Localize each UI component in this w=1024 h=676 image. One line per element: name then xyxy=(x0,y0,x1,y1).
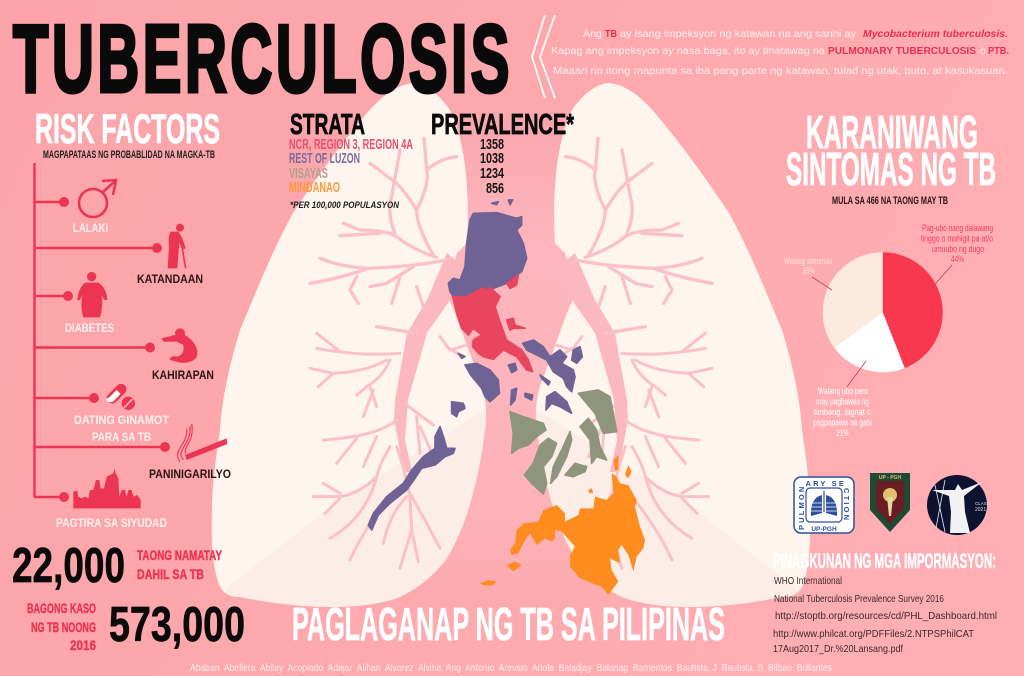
pie label: cough: linggo o mahigit pa at/o xyxy=(921,234,993,244)
table headers: STRATA xyxy=(290,109,365,141)
intro text: Maaari rin itong mapunta sa iba pang parte ng katawan, tulad ng utak, buto, at kasukasuan. xyxy=(553,65,1008,77)
sources list xyxy=(773,575,997,655)
heading: risk factors: RISK FACTORS xyxy=(35,105,220,152)
table headers: PREVALENCE* xyxy=(431,109,574,141)
table region names xyxy=(289,136,413,196)
pie label: no cough but other symptoms: pagpapawis sa gabi xyxy=(813,418,872,428)
table region names: REST OF LUZON xyxy=(289,150,360,167)
label: paninigarilyo: PANINIGARILYO xyxy=(149,469,231,481)
pie label: no cough but other symptoms: may pagbawas ng xyxy=(816,396,869,406)
logo: pulmonary section: PULMONARY SECTION xyxy=(799,481,849,530)
pie label: no symptoms xyxy=(784,256,832,276)
intro text: PULMONARY TUBERCULOSIS xyxy=(828,45,976,57)
risk factors subheading: MAGPAPATAAS NG PROBABLIDAD NA MAGKA-TB xyxy=(43,149,215,161)
icon: male symbol xyxy=(79,180,116,217)
icon: poverty, begging person xyxy=(162,328,197,363)
logo: class 2021 xyxy=(927,475,990,535)
table prevalence numbers: 1234 xyxy=(480,165,504,182)
risk factor timeline xyxy=(34,163,170,502)
table prevalence numbers: 856 xyxy=(486,180,504,197)
stat: new cases caption xyxy=(27,600,96,653)
map: Mindanao xyxy=(480,455,645,595)
intro text xyxy=(551,28,1009,77)
icon: elderly person with cane xyxy=(168,224,186,268)
pie label: no cough but other symptoms: timbang, lagnat o xyxy=(814,407,871,417)
label: diabetes: DIABETES xyxy=(65,323,114,335)
label: dating ginamot para sa tb: PARA SA TB xyxy=(92,432,151,444)
intro text: ay isang impeksyon ng katawan na ang sanhi ay xyxy=(620,28,857,40)
sources list: http://stoptb.org/resources/cd/PHL_Dashboard.html xyxy=(775,610,997,622)
label: dating ginamot para sa tb xyxy=(74,415,169,444)
sources list: WHO International xyxy=(774,575,842,587)
map: Visayas xyxy=(510,390,617,494)
stat: new cases caption: 2016 xyxy=(70,637,96,653)
heading: karaniwang sintomas xyxy=(786,106,996,195)
stat: new cases number: 573,000 xyxy=(109,598,245,652)
pie label: no symptoms: Walang sintomas xyxy=(784,256,832,266)
trachea column xyxy=(440,120,584,610)
label: lalaki: LALAKI xyxy=(73,223,108,235)
icon: cigarette xyxy=(178,424,227,462)
label: dating ginamot para sa tb: DATING GINAMOT xyxy=(74,415,169,427)
strata table xyxy=(289,109,574,211)
icon: overweight person xyxy=(77,272,107,317)
pie label: cough xyxy=(921,223,993,264)
logo: department of medicine shield xyxy=(870,473,910,532)
stat: new cases caption: NG TB NOONG xyxy=(31,619,96,635)
logo: pulmonary section: UP-PGH xyxy=(811,526,837,533)
stat: deaths caption: TAONG NAMATAY xyxy=(137,547,222,563)
intro text: PTB. xyxy=(988,45,1009,57)
pie label: no cough but other symptoms xyxy=(813,386,872,438)
table prevalence numbers xyxy=(480,136,504,197)
right lung illustration xyxy=(522,83,822,620)
logo: class 2021: CLASS xyxy=(975,501,990,506)
sources list: 17Aug2017_Dr.%20Lansang.pdf xyxy=(773,643,903,655)
left lung illustration xyxy=(200,83,500,620)
pie label: no symptoms: 35% xyxy=(802,266,815,276)
logo: department of medicine shield: UP - PGH xyxy=(879,475,901,481)
pie label: no cough but other symptoms: Walang ubo pero xyxy=(818,386,868,396)
icon: pills xyxy=(105,382,135,410)
stat: deaths caption: DAHIL SA TB xyxy=(137,566,204,582)
pie label: cough: 44% xyxy=(951,254,964,264)
table headers xyxy=(290,109,574,141)
table region names: NCR, REGION 3, REGION 4A xyxy=(289,136,413,153)
table prevalence numbers: 1038 xyxy=(480,150,504,167)
icon: double chevron xyxy=(532,15,555,98)
map: Rest of Luzon xyxy=(368,200,582,530)
authors list: Ababan Abellera Abilay Acopiado Adajar Alihan Alvarez Alvina Ang Antonio Arevalo Ariola Baladjay Balanag Barrientos Bautista, J Bautista, S Bilbao Brillantes xyxy=(190,662,832,674)
intro text: Mycobacterium tuberculosis. xyxy=(863,28,1008,40)
pie label: cough: Pag-ubo nang dalawang xyxy=(922,223,993,233)
intro text: Kapag ang impeksyon ay nasa baga, ito ay tinatawag na xyxy=(551,45,825,57)
stat: new cases caption: BAGONG KASO xyxy=(27,600,96,616)
symptoms subheading: MULA SA 466 NA TAONG MAY TB xyxy=(832,195,948,207)
logo: class 2021: 2021 xyxy=(975,507,986,513)
intro text: TB xyxy=(605,28,617,40)
pie label: no cough but other symptoms: 21% xyxy=(836,428,849,438)
label: pagtira sa siyudad: PAGTIRA SA SIYUDAD xyxy=(56,518,167,530)
icon: city skyline xyxy=(73,468,141,508)
label: kahirapan: KAHIRAPAN xyxy=(152,370,214,382)
sources list: National Tuberculosis Prevalence Survey 2016 xyxy=(774,593,944,605)
intro text: o xyxy=(980,45,986,57)
label: katandaan: KATANDAAN xyxy=(137,274,203,286)
table footnote: *PER 100,000 POPULASYON xyxy=(290,200,400,211)
intro text: Ang xyxy=(583,28,602,40)
sources list: http://www.philcat.org/PDFFiles/2.NTPSPhilCAT xyxy=(773,628,975,640)
pie chart xyxy=(812,252,952,387)
table region names: MINDANAO xyxy=(289,179,340,196)
map: NCR, Region 3, Region 4A xyxy=(453,275,533,372)
pie label: cough: umuubo ng dugo xyxy=(932,244,984,254)
stat: deaths number: 22,000 xyxy=(12,539,125,593)
Philippines map xyxy=(368,200,617,530)
table prevalence numbers: 1358 xyxy=(480,136,504,153)
stat: deaths caption xyxy=(137,547,222,582)
title: TUBERCULOSIS xyxy=(13,4,513,112)
table region names: VISAYAS xyxy=(289,165,328,182)
